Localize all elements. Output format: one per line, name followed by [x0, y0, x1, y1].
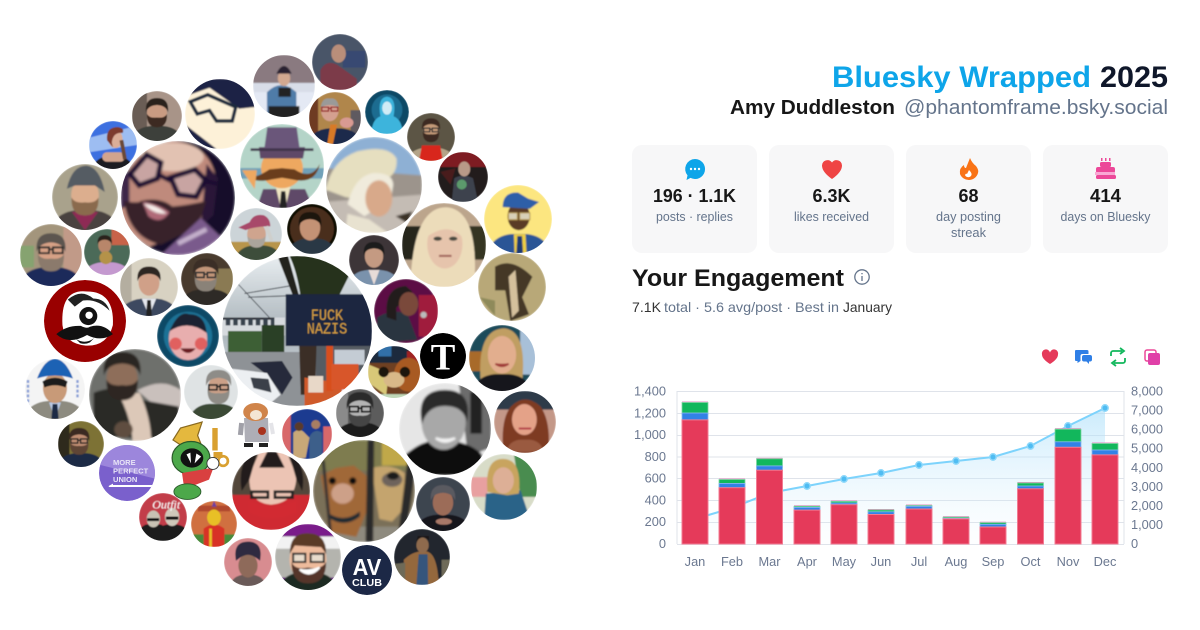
panel: posts and replies: 196 · 1.1K — [653, 186, 736, 206]
right axis labels: 0 — [1131, 536, 1138, 551]
avatar: man eating in lavender shirt — [84, 229, 130, 278]
cumulative line — [695, 405, 1108, 519]
cumulative area — [695, 408, 1105, 544]
avatar: two dogs at fence — [313, 440, 415, 542]
right axis labels: 1,000 — [1131, 517, 1163, 532]
icon: reply legend — [1075, 350, 1092, 364]
month labels: Dec — [1094, 554, 1117, 569]
month labels: Apr — [797, 554, 818, 569]
avatar: man in pink cap — [230, 208, 282, 261]
avatar: bearded man — [132, 91, 182, 144]
avatar: man in suit — [120, 258, 178, 319]
engagement summary — [632, 299, 892, 315]
month labels: Jul — [911, 554, 927, 569]
avatar: painted man in tan jacket — [394, 529, 450, 585]
avatar: Schumer pointing — [309, 92, 361, 147]
avatar: woman with head wrap on pink — [224, 538, 272, 586]
avatar: cartoon detective with mustache — [240, 124, 324, 208]
panel: posts and replies: posts · replies — [656, 210, 733, 224]
avatar: child in blue hood — [157, 305, 219, 367]
month labels: Nov — [1057, 554, 1080, 569]
avatar: doge in tracksuit — [240, 403, 273, 447]
avatar: man in apron — [407, 113, 455, 165]
avatar: New York Times logo: T — [431, 336, 455, 377]
avatar: yellow chicken mascot — [191, 501, 237, 547]
avatar: sepia figure on rock wall — [478, 253, 546, 321]
avatar: big smiling man with glasses — [121, 141, 235, 255]
avatar: Marvin the Martian — [172, 422, 228, 499]
right axis labels: 2,000 — [1131, 498, 1163, 513]
avatar: black and white man with glasses — [336, 389, 384, 439]
avatar: blonde woman in blue top — [471, 454, 537, 520]
avatar: woman with grey hair and dark coat — [416, 477, 470, 534]
avatar: painted woman in white bonnet — [326, 137, 422, 233]
avatar: huge street sign photo — [222, 256, 372, 406]
month labels: Oct — [1021, 554, 1041, 569]
avatar: top man in maroon hoodie — [312, 34, 368, 90]
left axis labels: 1,200 — [634, 406, 666, 420]
right axis labels — [1131, 384, 1163, 551]
chart legend icons — [1042, 348, 1160, 366]
avatar: man in light blue suit — [349, 235, 399, 288]
avatar: hooded figure in cyan — [365, 90, 409, 134]
left axis labels: 1,000 — [634, 427, 666, 442]
user name and handle: @phantomframe.bsky.social — [904, 97, 1168, 119]
panel: likes received: likes received — [794, 210, 869, 224]
title: 2025 — [1100, 61, 1168, 94]
avatar: man with green shirt in chair — [438, 152, 488, 202]
stacked bars — [682, 402, 1118, 544]
avatar: woman in snow — [253, 55, 315, 119]
right axis labels: 7,000 — [1131, 402, 1163, 418]
title: Bluesky Wrapped — [832, 61, 1091, 94]
avatar: gremlin Gizmo — [368, 346, 423, 399]
heading: your engagement: Your Engagement — [632, 265, 844, 292]
engagement summary: January — [843, 299, 892, 315]
right axis labels: 6,000 — [1131, 422, 1163, 436]
panel: days on Bluesky: days on Bluesky — [1060, 210, 1151, 224]
engagement summary: total · 5.6 avg/post · Best in — [664, 299, 839, 315]
avatar: woman singing with dreadlocks — [374, 279, 438, 343]
icon: like legend — [1042, 349, 1058, 364]
icon: repost legend — [1111, 348, 1125, 366]
panel: day posting streak: streak — [951, 226, 987, 240]
avatar: Harris handshake with flags — [282, 409, 332, 459]
right axis labels: 3,000 — [1131, 479, 1163, 494]
avatar: man with dark frame — [287, 204, 337, 254]
right axis labels: 8,000 — [1131, 384, 1163, 398]
avatar: illustrated glasses — [185, 79, 255, 149]
panel: likes received — [769, 145, 894, 253]
avatar: Natty Boh mascot — [44, 280, 126, 362]
icon: quote legend — [1145, 350, 1160, 365]
panel: days on Bluesky — [1043, 145, 1168, 253]
user name and handle: Amy Duddleston — [730, 97, 895, 119]
month labels: Aug — [945, 554, 967, 569]
month labels: Mar — [758, 554, 781, 569]
avatar: AV Club logo — [342, 545, 392, 595]
month labels: Sep — [982, 554, 1004, 569]
avatar: man in blue party hat — [25, 359, 85, 422]
avatar: grey bearded man with glasses — [181, 253, 233, 308]
avatar: The Outfit podcast — [139, 493, 188, 541]
avatar: grey haired man with plaid — [184, 365, 239, 421]
left axis labels — [634, 384, 666, 551]
chart: monthly engagement — [634, 384, 1163, 569]
panel: likes received: 6.3K — [812, 186, 850, 206]
left axis labels: 600 — [645, 470, 666, 486]
icon: chat bubble — [685, 159, 705, 180]
avatar: smiling man black and white — [399, 383, 491, 475]
avatar cluster — [20, 34, 556, 595]
engagement summary: 7.1K — [632, 299, 662, 315]
avatar: More Perfect Union logo — [99, 445, 155, 501]
avatar: man in grey cap — [52, 164, 118, 233]
avatar: man on couch with cat — [89, 349, 181, 441]
month labels: Jun — [871, 554, 891, 569]
avatar: red haired woman — [494, 391, 556, 453]
left axis labels: 400 — [645, 492, 666, 508]
month labels: Feb — [721, 554, 743, 569]
avatar: blonde woman looking up — [402, 203, 486, 287]
left axis labels: 1,400 — [634, 384, 666, 398]
left axis labels: 0 — [659, 536, 666, 551]
left axis labels: 200 — [645, 514, 666, 529]
right axis labels: 4,000 — [1131, 460, 1163, 475]
avatar: upside-down red hair woman — [232, 452, 310, 530]
avatar: New York Times logo — [420, 333, 466, 379]
avatar: bearded man in polo — [58, 421, 104, 469]
panel: posts and replies — [632, 145, 757, 253]
panel: day posting streak: day posting — [936, 210, 1001, 224]
panel: day posting streak: 68 — [958, 186, 978, 206]
avatar: man with glasses smiling outdoors — [20, 224, 82, 289]
avatar: cartoon man in blue cap on yellow — [484, 185, 552, 254]
right axis labels: 5,000 — [1131, 440, 1163, 456]
icon: flame — [960, 158, 978, 180]
month labels: Jan — [685, 554, 705, 569]
avatar: cartoon man with glasses — [275, 524, 341, 592]
panel: day posting streak — [906, 145, 1031, 253]
panel: days on Bluesky: 414 — [1090, 186, 1121, 206]
month labels — [685, 554, 1117, 569]
avatar: blonde woman in black turtleneck — [469, 325, 537, 394]
left axis labels: 800 — [645, 449, 666, 464]
icon: heart — [822, 160, 842, 179]
icon: info — [855, 270, 869, 284]
avatar: woman with red hair on blue — [89, 121, 137, 170]
icon: birthday cake — [1095, 158, 1116, 179]
month labels: May — [832, 554, 857, 569]
user name and handle — [730, 97, 1168, 119]
